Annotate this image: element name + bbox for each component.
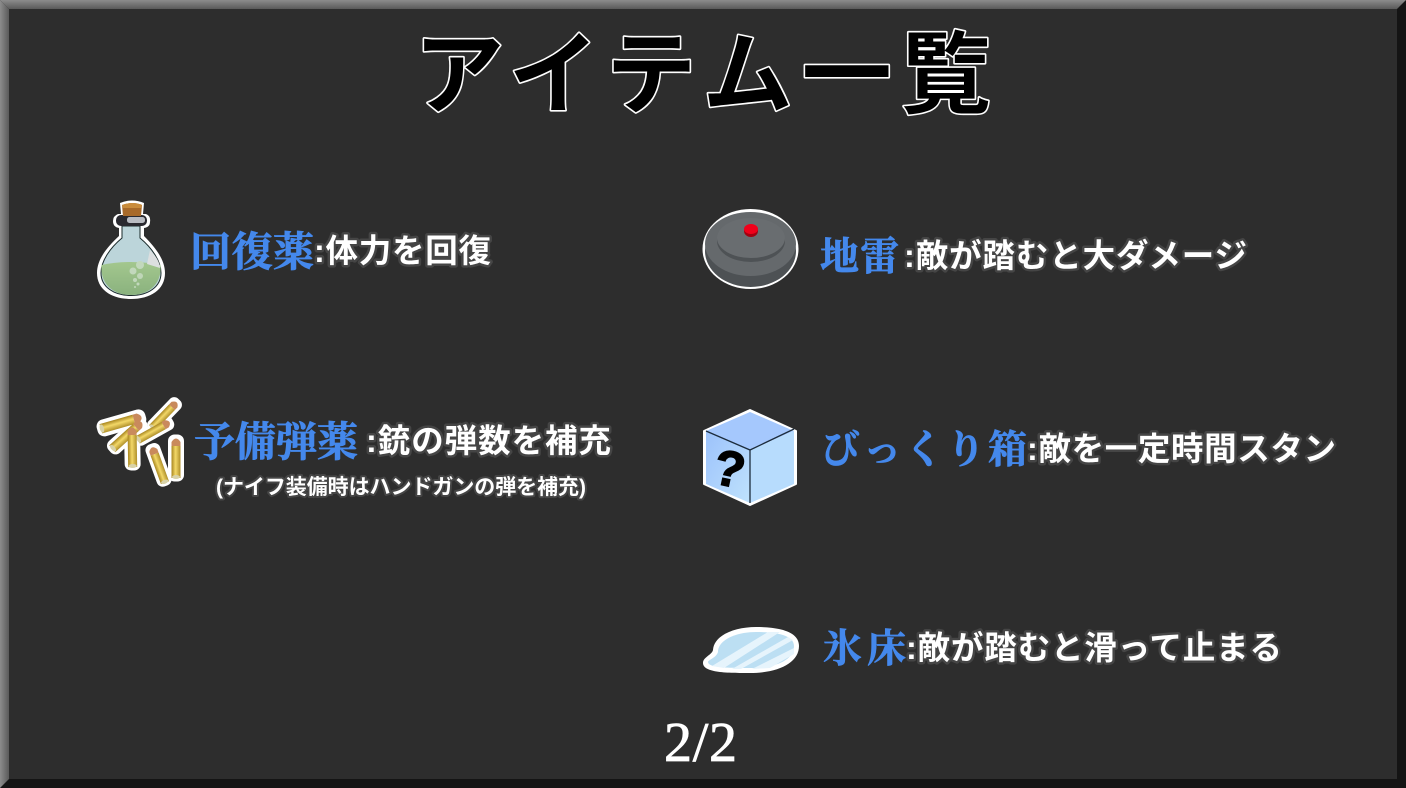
title: アイテム一覧 <box>414 26 991 126</box>
label: ice floor: :敵が踏むと滑って止まる <box>906 629 1282 666</box>
label: potion: :体力を回復 <box>314 233 491 269</box>
icon: surprise box: ? <box>709 439 750 500</box>
icon: ice floor <box>703 627 799 673</box>
label: ammo: 予備弾薬 <box>194 419 358 465</box>
icon: potion flask <box>97 200 165 299</box>
label: surprise box <box>821 429 1336 472</box>
label: surprise box: :敵を一定時間スタン <box>1027 431 1336 467</box>
label: ammo: (ナイフ装備時はハンドガンの弾を補充) <box>216 476 586 499</box>
icon: surprise box <box>704 410 796 505</box>
label: potion <box>190 229 491 275</box>
label: ice floor <box>823 628 1282 671</box>
label: landmine <box>820 236 1247 279</box>
label: surprise box: びっくり箱 <box>821 429 1027 472</box>
label: potion: 回復薬 <box>190 229 314 275</box>
page number: 2/2 <box>664 712 737 774</box>
label: ice floor: 氷床 <box>823 628 906 671</box>
label: landmine: :敵が踏むと大ダメージ <box>904 237 1247 274</box>
icon: landmine <box>702 209 798 289</box>
label: ammo: :銃の弾数を補充 <box>366 423 611 459</box>
icon: bullets <box>99 399 180 485</box>
label: landmine: 地雷 <box>820 236 899 279</box>
label: ammo <box>194 419 611 499</box>
